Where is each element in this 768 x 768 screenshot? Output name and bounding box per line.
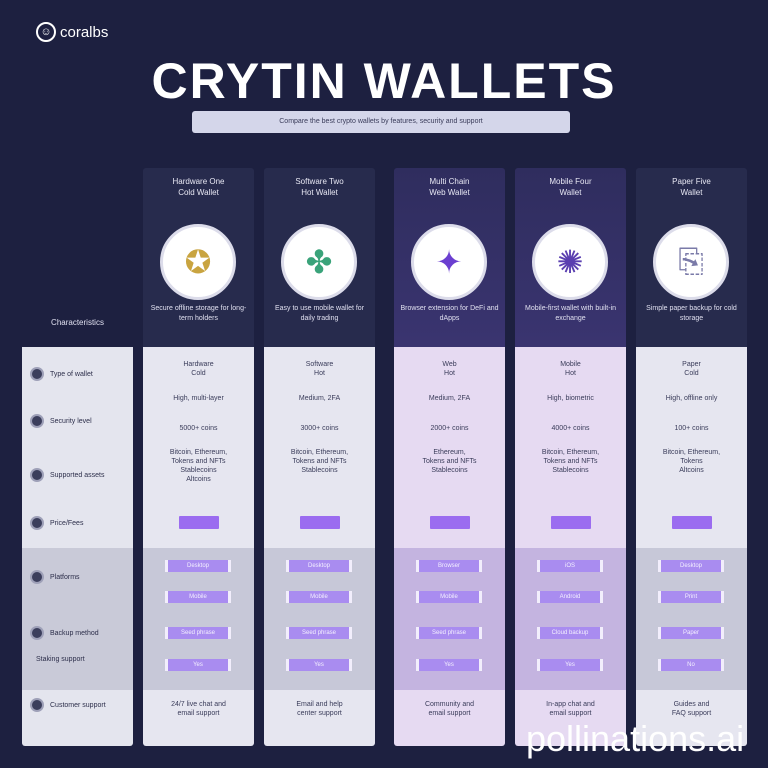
label column: Type of wallet <box>50 370 93 378</box>
wallet column 5: Tokens <box>680 458 703 465</box>
wallet column 5: No <box>687 662 695 668</box>
wallet column 5: Guides and <box>674 701 709 708</box>
wallet column 3: Hot <box>444 370 455 377</box>
wallet column 5: Altcoins <box>679 467 704 474</box>
wallet column 5: Bitcoin, Ethereum, <box>663 449 720 456</box>
label column <box>22 318 133 746</box>
wallet column 5: Paper <box>682 361 701 368</box>
wallet column 4: Hot <box>565 370 576 377</box>
wallet column 4: Tokens and NFTs <box>543 458 598 465</box>
wallet column 5: ⎘ <box>678 243 704 279</box>
wallet column 1: Altcoins <box>186 476 211 483</box>
wallet column 1: Tokens and NFTs <box>171 458 226 465</box>
wallet column 4 <box>515 168 626 746</box>
wallet column 2: center support <box>297 710 342 717</box>
wallet column 4: iOS <box>565 563 575 569</box>
wallet column 5: Paper Five <box>672 177 711 186</box>
wallet column 2: Software Two <box>295 177 344 186</box>
label column: Staking support <box>36 656 85 663</box>
wallet column 3: Browser <box>438 563 460 569</box>
wallet column 1: Cold Wallet <box>178 188 219 197</box>
wallet column 5: Print <box>685 594 697 600</box>
wallet column 1: Bitcoin, Ethereum, <box>170 449 227 456</box>
wallet column 4: ✺ <box>557 244 583 280</box>
wallet column 1: Mobile <box>189 594 207 600</box>
wallet column 1: 24/7 live chat and <box>171 701 226 708</box>
wallet column 1: Seed phrase <box>181 630 215 636</box>
wallet column 4: 4000+ coins <box>552 425 589 432</box>
wallet column 4: High, biometric <box>547 395 594 402</box>
wallet column 3: Seed phrase <box>432 630 466 636</box>
wallet column 4: Stablecoins <box>552 467 589 474</box>
wallet column 4: Mobile <box>560 361 581 368</box>
wallet column 3: email support <box>428 710 471 717</box>
wallet column 1: Secure offline storage for long-term holders <box>151 305 246 322</box>
wallet column 1: Hardware One <box>172 177 225 186</box>
label column: Backup method <box>50 630 99 636</box>
wallet column 2: Seed phrase <box>302 630 336 636</box>
subtitle bar: Compare the best crypto wallets by features, security and support <box>279 118 483 125</box>
wallet column 4: Yes <box>565 662 575 668</box>
wallet column 3: Yes <box>444 662 454 668</box>
wallet column 1: Cold <box>191 370 206 377</box>
wallet column 4: Cloud backup <box>552 630 588 636</box>
wallet column 2: Yes <box>314 662 324 668</box>
wallet column 2: Mobile <box>310 594 328 600</box>
wallet column 2: Bitcoin, Ethereum, <box>291 449 348 456</box>
wallet column 3: Mobile <box>440 594 458 600</box>
wallet column 2: Medium, 2FA <box>299 395 340 402</box>
label column: Price/Fees <box>50 520 83 526</box>
logo: coralbs <box>60 24 108 40</box>
label column: Platforms <box>50 574 80 580</box>
wallet column 3: Medium, 2FA <box>429 395 470 402</box>
wallet column 4: Mobile Four <box>549 177 592 186</box>
wallet column 5: High, offline only <box>666 395 717 402</box>
wallet column 4: In-app chat and <box>546 701 595 708</box>
wallet column 3: Multi Chain <box>429 177 470 186</box>
watermark: pollinations.ai <box>526 718 744 759</box>
wallet column 2: Tokens and NFTs <box>292 458 347 465</box>
wallet column 2: 3000+ coins <box>301 425 338 432</box>
wallet column 1: Stablecoins <box>180 467 217 474</box>
wallet column 5: 100+ coins <box>674 425 709 432</box>
wallet column 3: Web Wallet <box>429 188 470 197</box>
wallet column 5: Desktop <box>680 563 702 569</box>
wallet column 2: Easy to use mobile wallet for daily trading <box>275 305 364 322</box>
wallet column 3: Browser extension for DeFi and dApps <box>400 305 499 322</box>
logo <box>36 22 108 42</box>
wallet column 4: Mobile-first wallet with built-in exchange <box>525 305 616 322</box>
wallet column 1: High, multi-layer <box>173 395 224 402</box>
wallet column 3: ✦ <box>436 244 462 280</box>
wallet column 3: Tokens and NFTs <box>422 458 477 465</box>
wallet column 1: Desktop <box>187 563 209 569</box>
wallet column 3: Web <box>442 361 457 368</box>
wallet column 2: Stablecoins <box>301 467 338 474</box>
wallet column 3: 2000+ coins <box>431 425 468 432</box>
wallet column 3 <box>394 168 505 746</box>
wallet column 5: Cold <box>684 370 699 377</box>
logo: ☺ <box>40 26 52 38</box>
wallet column 4: Wallet <box>560 188 581 197</box>
wallet column 1 <box>143 168 254 746</box>
label column: Security level <box>50 418 92 424</box>
wallet column 5 <box>636 168 747 746</box>
label column: Characteristics <box>51 318 104 327</box>
wallet column 2: Software <box>306 361 333 368</box>
wallet column 1: ✪ <box>185 244 211 280</box>
wallet column 3: Ethereum, <box>433 449 466 456</box>
wallet column 2: Hot <box>314 370 325 377</box>
wallet column 5: Paper <box>683 630 699 636</box>
label column: Supported assets <box>50 472 104 478</box>
wallet column 2: ✤ <box>306 244 332 280</box>
subtitle bar <box>192 111 570 133</box>
wallet column 1: Yes <box>193 662 203 668</box>
wallet column 4: email support <box>549 710 592 717</box>
wallet column 4: Bitcoin, Ethereum, <box>542 449 599 456</box>
wallet column 3: Stablecoins <box>431 467 468 474</box>
wallet column 4: Android <box>560 594 580 600</box>
wallet column 2: Hot Wallet <box>301 188 338 197</box>
wallet column 3: Community and <box>425 701 474 708</box>
wallet column 1: 5000+ coins <box>180 425 217 432</box>
wallet column 5: Simple paper backup for cold storage <box>646 305 737 322</box>
wallet column 5: Wallet <box>681 188 702 197</box>
wallet column 1: email support <box>177 710 220 717</box>
wallet column 5: FAQ support <box>672 710 711 717</box>
wallet column 1: Hardware <box>183 361 214 368</box>
title: CRYTIN WALLETS <box>151 53 616 109</box>
wallet column 2 <box>264 168 375 746</box>
wallet column 2: Desktop <box>308 563 330 569</box>
wallet column 2: Email and help <box>296 701 343 708</box>
label column: Customer support <box>50 702 106 708</box>
